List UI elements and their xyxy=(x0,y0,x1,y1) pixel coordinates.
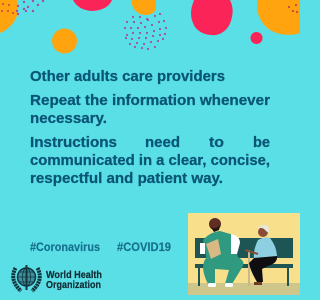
blob: top center pink xyxy=(73,0,112,11)
nurse: head xyxy=(209,218,221,230)
illustration background xyxy=(188,213,300,295)
dots: top-left purple cluster xyxy=(16,0,44,15)
text block: instructions xyxy=(30,134,270,187)
elder: blue top xyxy=(254,237,277,259)
logo: WHO wordmark: World Health xyxy=(46,269,102,281)
bench xyxy=(195,238,293,286)
text block: repeat the information: Repeat the information whenever xyxy=(30,92,270,109)
text block: instructions: respectful and patient way. xyxy=(30,170,223,187)
nurse: shoes xyxy=(208,283,233,287)
dots: top-left orange blob speckles xyxy=(1,3,14,14)
circle: orange xyxy=(52,28,77,54)
illustration: nurse and elder on bench xyxy=(188,213,300,295)
elder: head xyxy=(258,227,268,237)
logo: WHO emblem xyxy=(13,265,40,291)
elder: hair xyxy=(257,225,270,234)
nurse: torso xyxy=(203,231,238,262)
nurse: clipboard xyxy=(206,239,221,259)
blob: small top orange xyxy=(132,0,156,15)
heading: Other adults care providers xyxy=(30,68,225,85)
nurse: white sleeve xyxy=(231,234,240,254)
elder: shoe xyxy=(254,282,262,285)
logo: WHO wordmark xyxy=(46,269,102,291)
text block: instructions: Instructions xyxy=(30,134,117,151)
elder: walking cane xyxy=(248,250,250,286)
text block: repeat the information: necessary. xyxy=(30,110,107,127)
blob: top right pink xyxy=(191,0,233,35)
logo: WHO wordmark: Organization xyxy=(46,279,101,291)
nurse: trousers xyxy=(203,256,243,284)
text block: repeat the information xyxy=(30,92,270,127)
elder: arm xyxy=(245,250,258,254)
circle: small pink xyxy=(250,32,262,44)
text block: instructions: need xyxy=(145,134,180,151)
ground xyxy=(188,283,300,295)
blob: top-left orange xyxy=(0,0,18,33)
blob: top right orange xyxy=(257,0,300,35)
dots: center purple cluster xyxy=(124,13,167,50)
elder: trousers xyxy=(249,256,277,282)
text block: instructions: communicated in a clear, concise, xyxy=(30,152,270,169)
nurse: left sleeve xyxy=(200,243,205,254)
dots: top right orange blob speckles xyxy=(288,4,298,13)
hashtag: covid19: #COVID19 xyxy=(117,240,171,254)
text block: instructions: to xyxy=(209,134,224,151)
hashtag: coronavirus: #Coronavirus xyxy=(30,240,100,254)
text block: instructions: be xyxy=(253,134,270,151)
nurse: beard xyxy=(210,225,220,232)
